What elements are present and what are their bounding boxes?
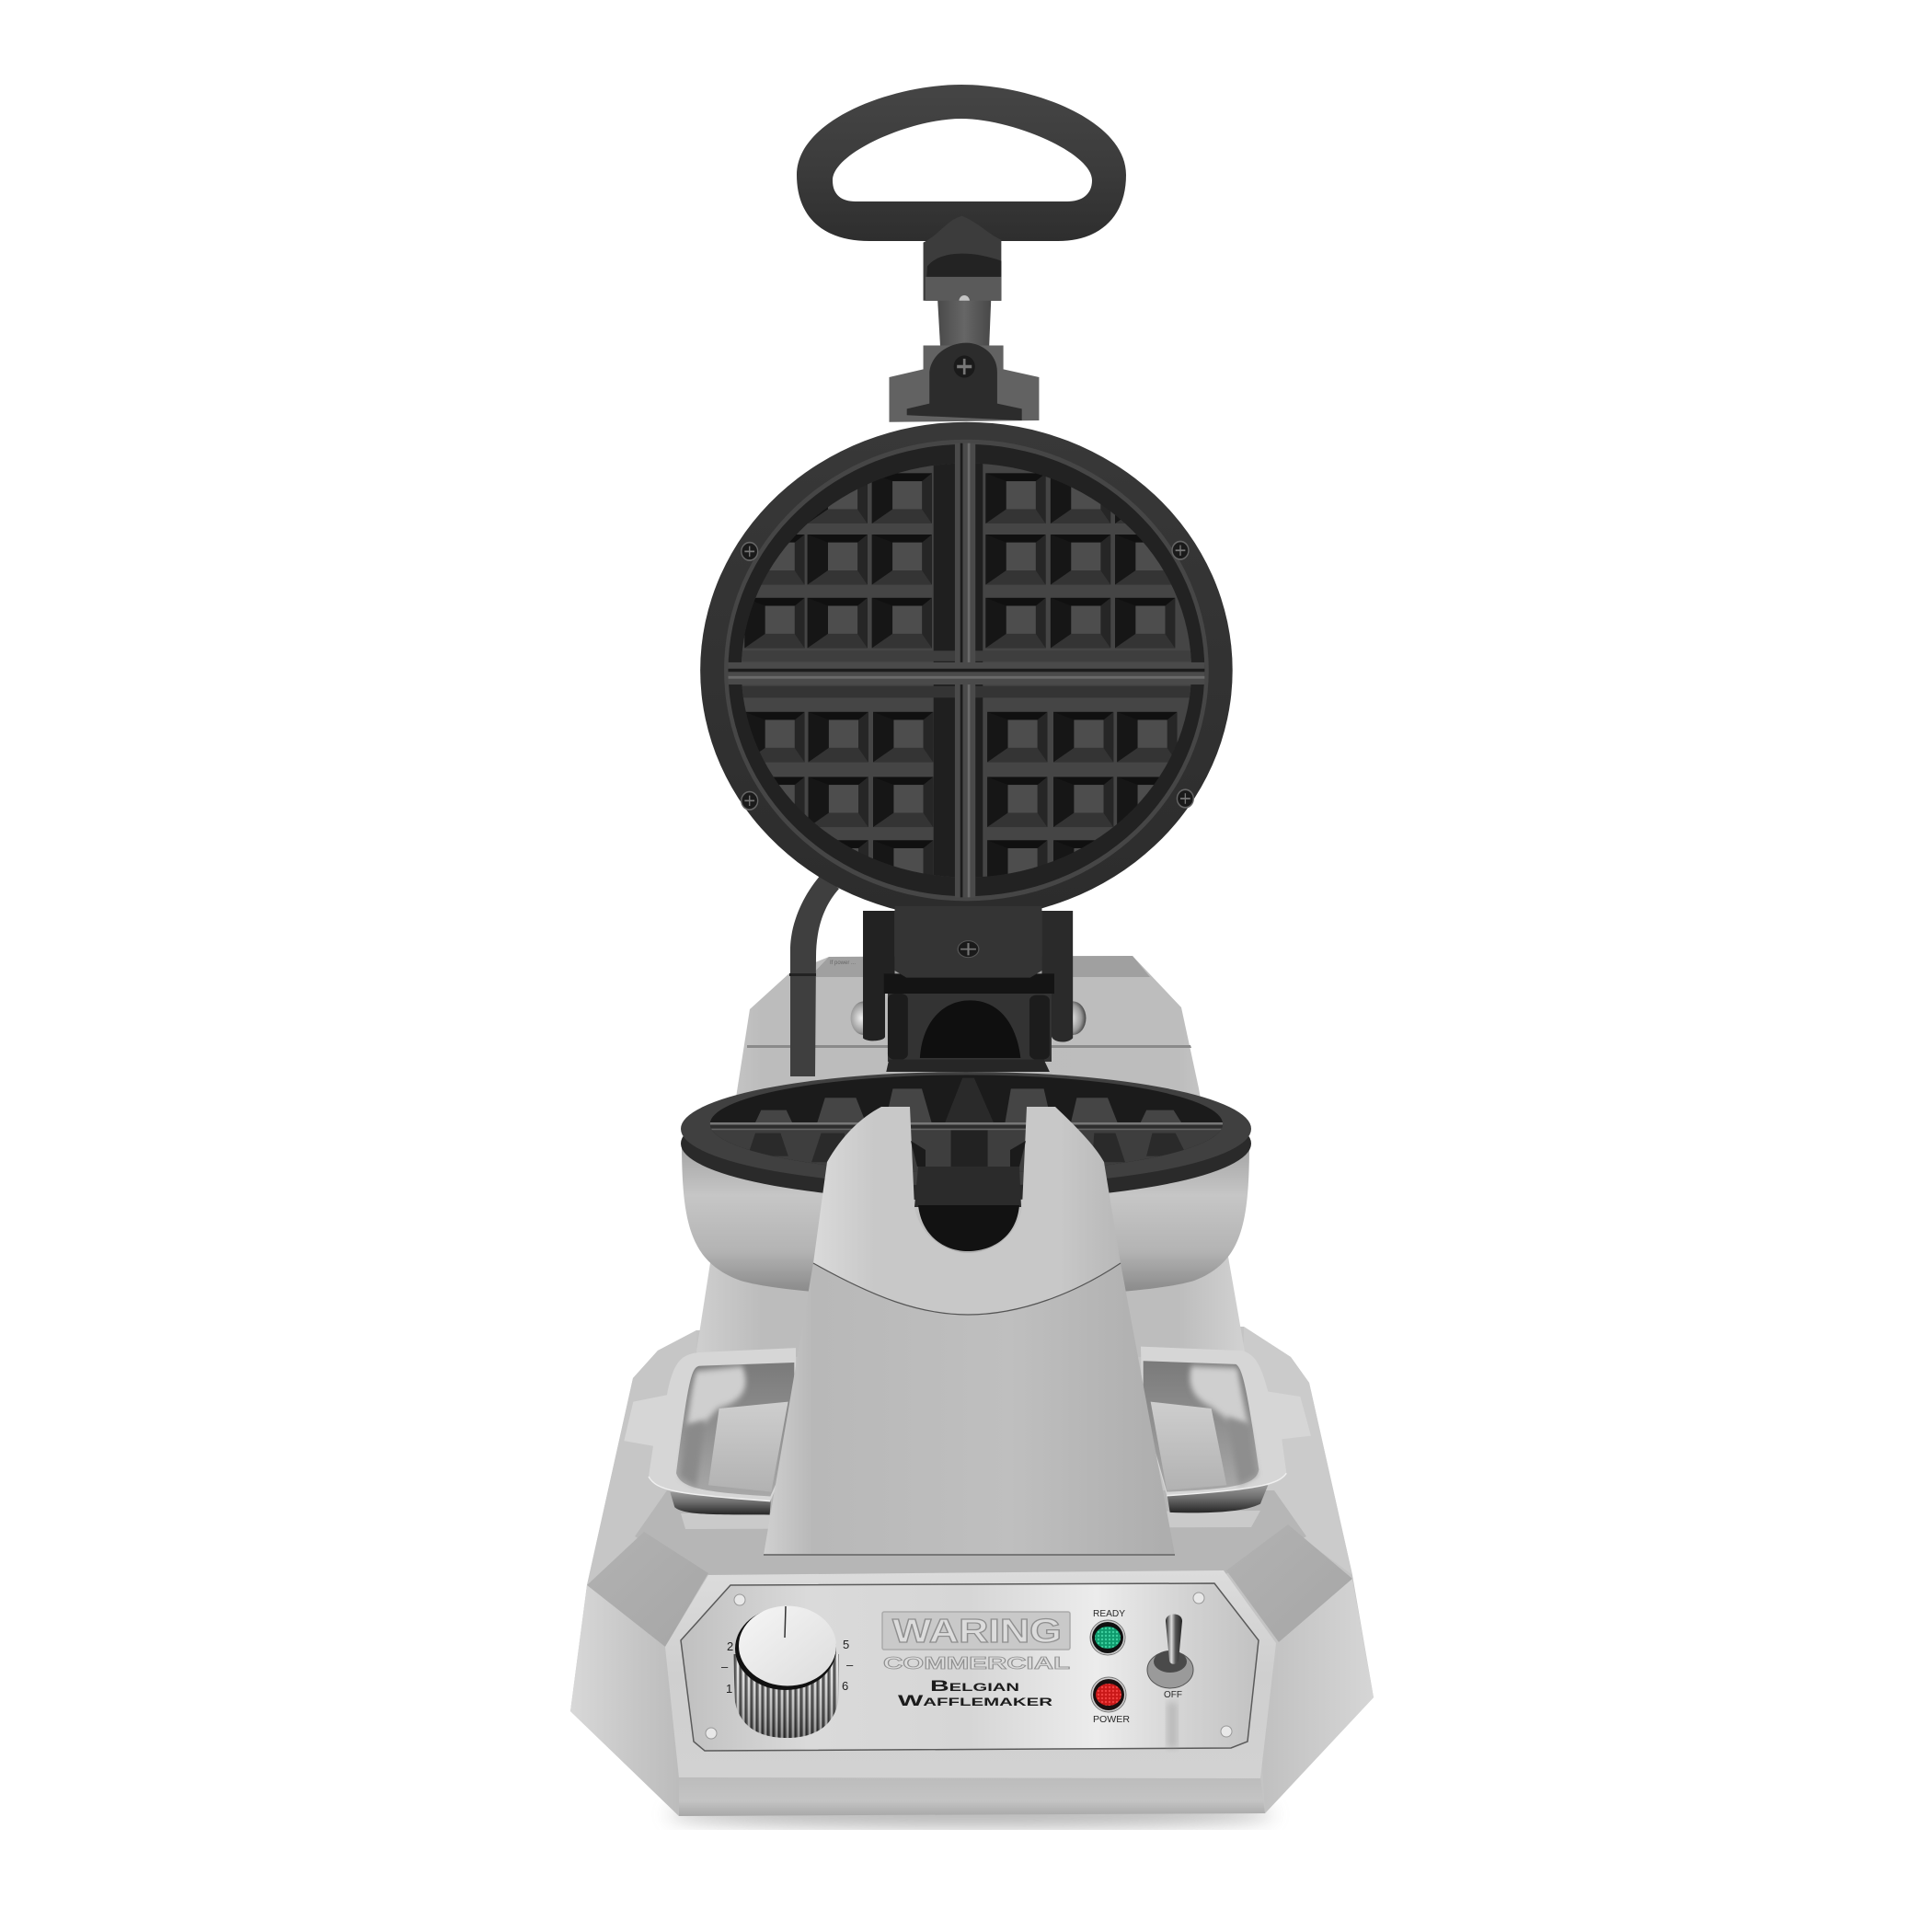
- silver bowl: [682, 1141, 1249, 1297]
- Wafflemaker label: Wafflemaker: [898, 1692, 1053, 1709]
- base right upper side: [1242, 1327, 1352, 1575]
- right hinge arm: [1041, 911, 1073, 1042]
- rim screw slots: [744, 545, 1190, 806]
- cord tube: [790, 874, 839, 1076]
- left drip tray: [624, 1348, 796, 1514]
- tray corner highlight: [1190, 1366, 1248, 1426]
- temperature dial numbers: 2: [727, 1639, 733, 1653]
- waffle grid: [742, 464, 1191, 877]
- rear body: [696, 956, 1245, 1357]
- temperature dial numbers: –: [846, 1658, 854, 1672]
- hinge foot: [886, 1060, 1050, 1072]
- toggle nut: [1147, 1651, 1193, 1688]
- temperature dial numbers: 1: [726, 1682, 732, 1696]
- COMMERCIAL logo: COMMERCIAL: [883, 1654, 1070, 1673]
- bottom lip: [679, 1777, 1265, 1816]
- hinge assembly: [851, 911, 1086, 1072]
- rim front edge: [681, 1087, 1251, 1201]
- upper left pockets: [744, 473, 932, 648]
- panel bezel: [665, 1570, 1276, 1778]
- faceplate rivets: [706, 1593, 1232, 1739]
- tray recess: [1167, 1485, 1268, 1512]
- handle neck: [924, 216, 1001, 301]
- centre channel: [951, 1130, 988, 1167]
- well cavity: [710, 1075, 1223, 1173]
- waffle ridges front row: [748, 1133, 1187, 1162]
- floor shadow: [667, 1801, 1274, 1827]
- slot dark block: [914, 1167, 1021, 1207]
- yoke shadow band: [884, 973, 1054, 994]
- cross bar: [709, 1122, 1224, 1125]
- knob ribbed body: [731, 1651, 842, 1739]
- base housing: [570, 1327, 1374, 1816]
- neck underside: [926, 254, 1001, 301]
- upper right pockets: [985, 473, 1175, 648]
- lower waffle plate: [681, 1072, 1251, 1297]
- slot shadow sides: [911, 1141, 926, 1167]
- cap seam: [813, 1263, 1121, 1315]
- lower left pockets: [744, 712, 933, 891]
- READY label: READY: [1093, 1609, 1125, 1619]
- knob pointer: [785, 1606, 786, 1638]
- WARING logo: WARING: [892, 1612, 1062, 1650]
- temperature dial numbers: [721, 1638, 854, 1696]
- toggle shadow: [1167, 1702, 1178, 1748]
- rear top strip: [810, 956, 1150, 977]
- tray rim lower highlight: [649, 1477, 770, 1501]
- handle grip: [797, 85, 1126, 241]
- temperature knob: [731, 1606, 842, 1739]
- lower plate well: [709, 1075, 1224, 1173]
- right knuckle: [1029, 995, 1050, 1060]
- grid floor: [742, 464, 1191, 878]
- bracket cover: [907, 343, 1022, 420]
- bracket wings: [890, 346, 1039, 422]
- product illustration: waffle maker: [570, 85, 1374, 1830]
- temperature dial numbers: 5: [843, 1638, 849, 1651]
- well floor: [709, 1130, 1224, 1173]
- left knuckle: [888, 994, 908, 1060]
- right lower face: [1260, 1579, 1374, 1813]
- vertical divider bar: [955, 443, 975, 897]
- POWER label: POWER: [1093, 1715, 1130, 1725]
- base silhouette: [570, 1327, 1374, 1816]
- tray back wall: [676, 1363, 794, 1496]
- tab plate: [895, 906, 1041, 978]
- base top deck: [635, 1490, 1306, 1575]
- temperature dial numbers: –: [721, 1660, 729, 1673]
- left chrome ball: [851, 1001, 877, 1035]
- tray corner highlight: [687, 1366, 745, 1426]
- support foot line: [764, 1554, 1175, 1556]
- tray recess: [670, 1492, 771, 1514]
- tray rim: [624, 1348, 796, 1501]
- knob crescent: [735, 1607, 836, 1690]
- tray floor: [1151, 1402, 1226, 1490]
- bracket screw: [954, 355, 975, 378]
- tray rim: [1141, 1347, 1311, 1496]
- hinge yoke: [888, 991, 1052, 1062]
- tray right wall shade: [1226, 1417, 1258, 1485]
- deck light band: [681, 1511, 1260, 1529]
- cord clamp: [789, 973, 816, 976]
- support cap: [813, 1107, 1121, 1315]
- tray rim lower highlight: [1167, 1473, 1286, 1496]
- lower right pockets: [987, 712, 1177, 891]
- tray back wall: [1144, 1361, 1259, 1492]
- neck rivet plate: [926, 277, 1001, 301]
- left hinge arm: [863, 911, 895, 1041]
- control panel: [665, 1570, 1276, 1778]
- horizontal divider bar: [729, 662, 1204, 684]
- upright support: [764, 1107, 1175, 1555]
- upper plate bevel: [724, 440, 1209, 901]
- temperature dial numbers: 6: [842, 1679, 848, 1693]
- left corner facet: [587, 1532, 708, 1647]
- ready light: [1090, 1620, 1125, 1655]
- warning label text: If power ...: [830, 960, 856, 966]
- right drip tray: [1141, 1347, 1311, 1512]
- upper plate well: [729, 444, 1204, 896]
- upper plate outer ring: [700, 422, 1233, 918]
- steel faceplate: [681, 1583, 1259, 1751]
- hinge tab under plate: [895, 906, 1041, 978]
- steel strap: [937, 301, 991, 351]
- embossed logo box: [882, 1612, 1070, 1650]
- tray left wall shade: [680, 1420, 706, 1487]
- left lower face: [570, 1585, 679, 1816]
- power light: [1091, 1677, 1126, 1712]
- centre ridge: [945, 1078, 994, 1122]
- handle and upper plate: [700, 85, 1233, 918]
- right chrome ball: [1060, 1001, 1086, 1035]
- power cord: [789, 874, 839, 1076]
- Belgian label: Belgian: [930, 1677, 1019, 1695]
- rim screws: [742, 541, 1193, 810]
- tab screw: [958, 941, 979, 958]
- rear seam: [747, 1045, 1191, 1048]
- tray floor: [708, 1402, 788, 1492]
- knob cap: [739, 1606, 836, 1685]
- slot black opening: [918, 1205, 1019, 1251]
- rear housing: [696, 956, 1245, 1357]
- arch opening: [920, 1000, 1020, 1058]
- toggle lever: [1166, 1614, 1182, 1664]
- toggle switch: [1147, 1614, 1193, 1748]
- base left upper side: [587, 1330, 696, 1585]
- OFF label: OFF: [1164, 1690, 1182, 1700]
- rim top: [681, 1072, 1251, 1186]
- support lower body: [764, 1263, 1175, 1555]
- waffle ridges back row: [755, 1088, 1181, 1122]
- centre channels: [934, 451, 983, 894]
- rivet: [959, 295, 970, 307]
- right corner facet: [1226, 1524, 1352, 1642]
